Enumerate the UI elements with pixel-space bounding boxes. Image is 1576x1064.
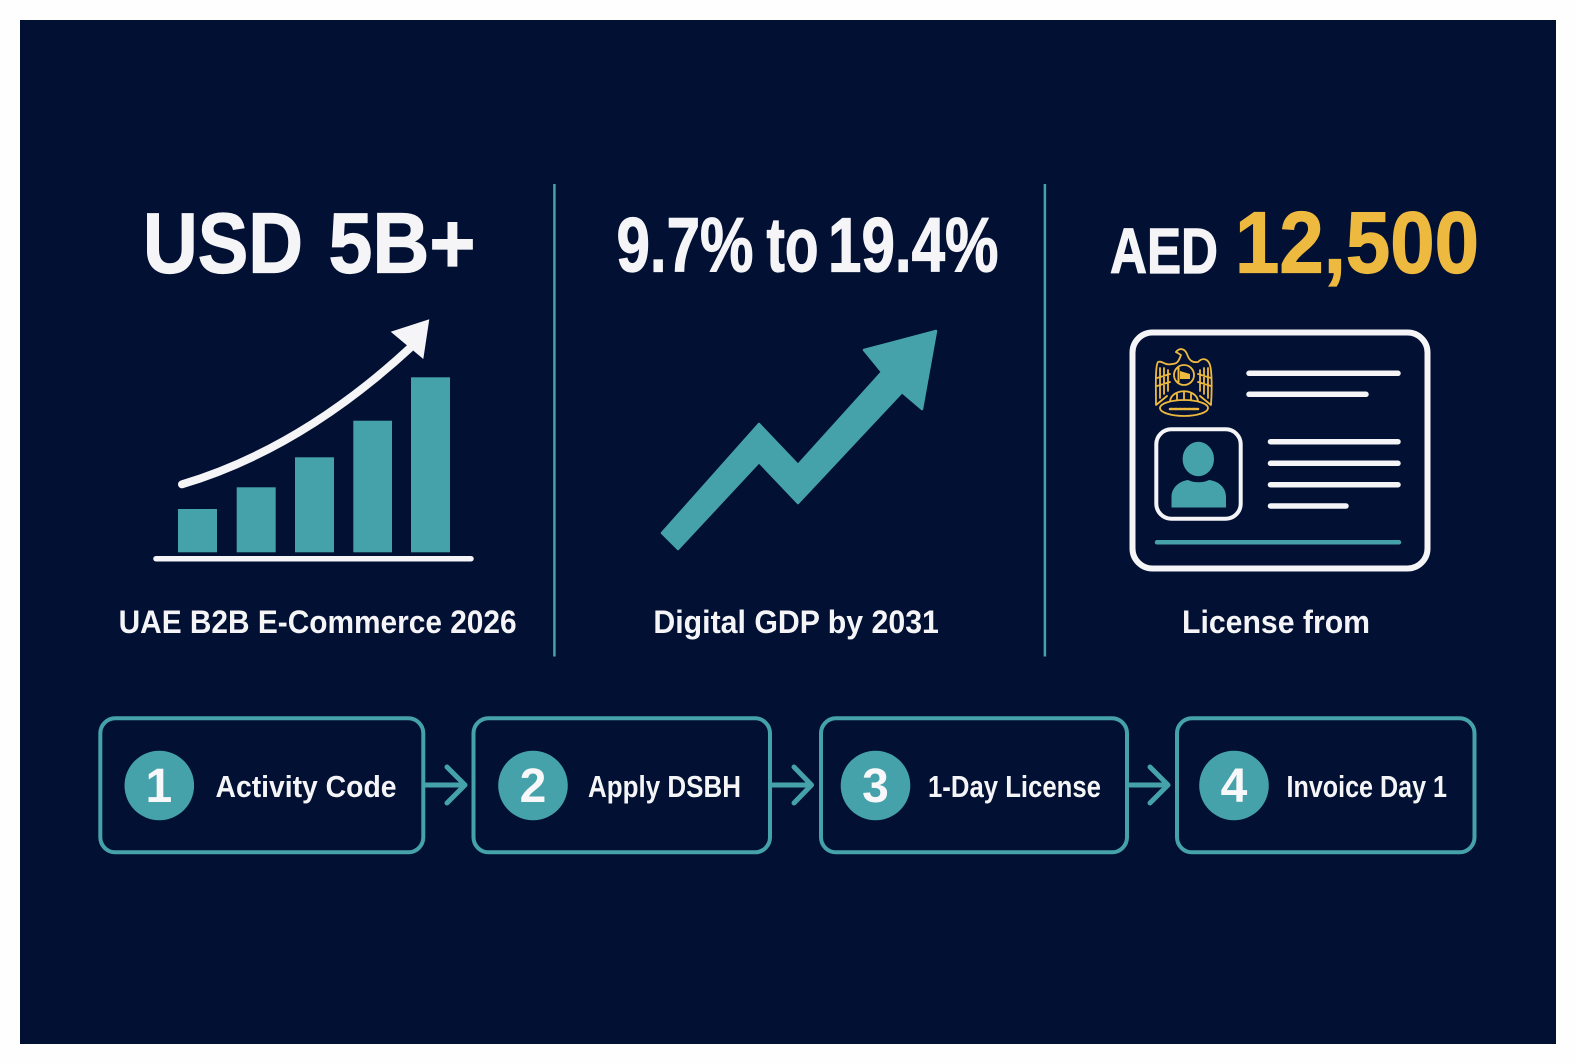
step 2: Apply DSBH: Apply DSBH [588, 770, 741, 804]
step 4: Invoice Day 1: 4 [1221, 760, 1248, 813]
heading: AED 12,500: AED [1110, 215, 1218, 287]
icon: UAE emblem [1156, 349, 1212, 416]
bar chart with growth arrow [156, 319, 471, 559]
caption: License from: License from [1182, 604, 1370, 640]
step 2: Apply DSBH [474, 718, 770, 852]
heading: USD 5B+: 5B+ [328, 196, 476, 292]
heading: USD 5B+ [143, 196, 476, 292]
portrait frame [1156, 429, 1241, 519]
panel: license cost [1110, 194, 1479, 640]
step 1: Activity Code [100, 718, 423, 852]
step 4: Invoice Day 1: Invoice Day 1 [1286, 770, 1447, 804]
step 3: 1-Day License: 3 [862, 760, 889, 813]
panel: market size [119, 196, 517, 640]
step 3: 1-Day License [821, 718, 1127, 852]
heading: 9.7% to 19.4%: 9.7% [616, 202, 754, 288]
heading: USD 5B+: USD [143, 196, 303, 292]
process flow [100, 718, 1474, 852]
text lines: top [1249, 373, 1398, 394]
heading: AED 12,500 [1110, 194, 1479, 292]
heading: 9.7% to 19.4%: to [766, 202, 818, 288]
step 4: Invoice Day 1 [1177, 718, 1474, 852]
heading: AED 12,500: 12,500 [1235, 194, 1479, 292]
caption: Digital GDP by 2031: Digital GDP by 2031 [653, 604, 939, 640]
caption: UAE B2B E-Commerce 2026: UAE B2B E-Commerce 2026 [119, 604, 517, 640]
heading: 9.7% to 19.4% [616, 202, 998, 288]
step 2: Apply DSBH: 2 [520, 760, 546, 813]
step 3: 1-Day License: 1-Day License [928, 770, 1101, 804]
arrow: step 2 to 3 [772, 767, 812, 803]
icon: license card [1132, 332, 1428, 568]
icon: zigzag growth arrow [662, 331, 936, 549]
heading: 9.7% to 19.4%: 19.4% [828, 202, 998, 288]
step 1: Activity Code: 1 [145, 760, 172, 813]
panel: digital GDP [616, 202, 998, 640]
arrow: step 1 to 2 [425, 767, 465, 803]
step 1: Activity Code: Activity Code [216, 770, 396, 804]
text lines: details [1270, 442, 1398, 506]
arrow: step 3 to 4 [1130, 767, 1168, 803]
